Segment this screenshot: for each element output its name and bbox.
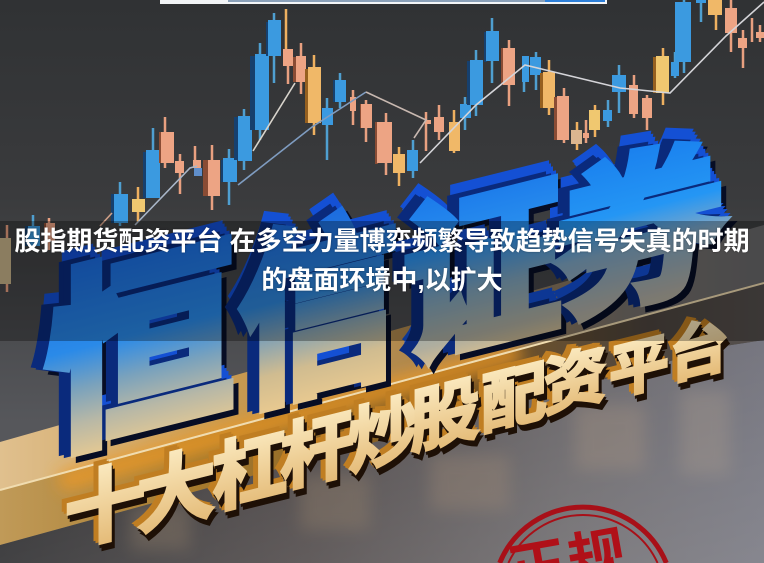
heading [14, 226, 750, 295]
title: 恒信证券: 信 [238, 189, 398, 438]
heading: 的盘面环境中,以扩大 [261, 265, 503, 295]
subtitle: 十大杠杆炒股配资平台: 十 [64, 451, 146, 563]
subtitle: 十大杠杆炒股配资平台: 平 [609, 326, 669, 408]
subtitle: 十大杠杆炒股配资平台: 资 [543, 337, 607, 425]
subtitle: 十大杠杆炒股配资平台: 杠 [212, 421, 288, 524]
title: 恒信证券: 证 [402, 157, 562, 393]
top banner edge [160, 0, 607, 4]
platform [0, 225, 764, 545]
subtitle: 十大杠杆炒股配资平台: 大 [136, 437, 216, 547]
subtitle: 十大杠杆炒股配资平台: 股 [410, 369, 480, 464]
stamp: 正规 [500, 507, 666, 563]
subtitle: 十大杠杆炒股配资平台: 台 [669, 310, 729, 392]
title: 恒信证券: 券 [554, 121, 726, 348]
subtitle: 十大杠杆炒股配资平台: 炒 [347, 387, 419, 485]
caption band [0, 221, 764, 341]
title: 恒信证券 [45, 121, 726, 484]
title: 恒信证券: 恒 [45, 218, 235, 484]
candlestick chart [0, 0, 764, 292]
subtitle: 十大杠杆炒股配资平台 [64, 310, 729, 563]
subtitle: 十大杠杆炒股配资平台: 配 [481, 354, 547, 444]
subtitle: 十大杠杆炒股配资平台: 杆 [280, 401, 354, 502]
trend lines [100, 2, 764, 226]
heading: 股指期货配资平台 在多空力量博弈频繁导致趋势信号失真的时期 [14, 226, 750, 256]
